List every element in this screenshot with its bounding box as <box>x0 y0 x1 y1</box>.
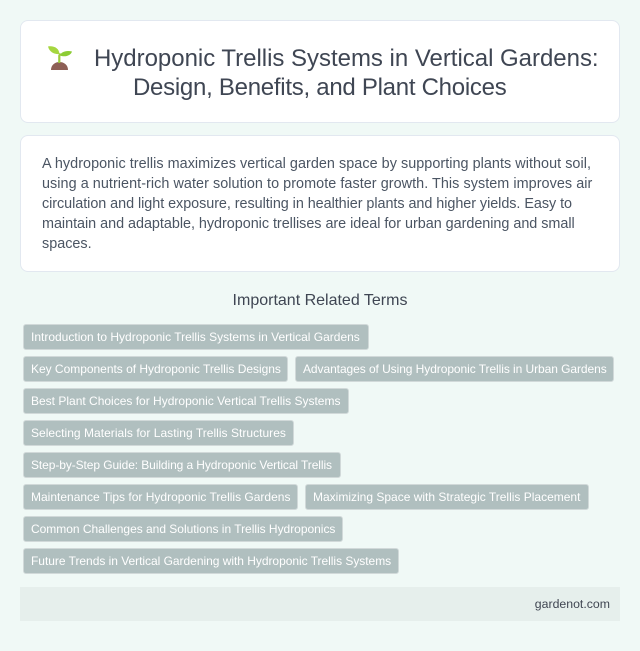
summary text: spaces. <box>42 236 92 252</box>
tag <box>23 324 369 350</box>
tag <box>23 484 298 510</box>
tag <box>305 484 589 510</box>
tag: Maintenance Tips for Hydroponic Trellis Gardens <box>31 490 290 504</box>
tag <box>295 356 614 382</box>
tag <box>23 548 399 574</box>
heading: important related terms: Important Related Terms <box>233 292 407 309</box>
title text <box>94 45 599 101</box>
tag <box>23 420 294 446</box>
panel: summary card <box>20 135 620 272</box>
tag: Maximizing Space with Strategic Trellis Placement <box>313 490 580 504</box>
tag <box>23 388 349 414</box>
tag: Common Challenges and Solutions in Trellis Hydroponics <box>31 522 335 536</box>
panel: title card <box>20 20 620 123</box>
panel: related term tags <box>23 324 614 574</box>
tag <box>23 452 341 478</box>
tag: Introduction to Hydroponic Trellis Systems in Vertical Gardens <box>31 330 360 344</box>
summary text: A hydroponic trellis maximizes vertical garden space by supporting plants without soil, <box>42 156 591 172</box>
footer bar <box>20 587 620 621</box>
summary text: maintain and adaptable, hydroponic trellises are ideal for urban gardening and small <box>42 216 575 232</box>
tag <box>23 516 343 542</box>
summary text: using a nutrient-rich water solution to promote faster growth. This system improves air <box>42 176 592 192</box>
tag: Selecting Materials for Lasting Trellis Structures <box>31 426 286 440</box>
tag: Advantages of Using Hydroponic Trellis in Urban Gardens <box>303 362 607 376</box>
summary text <box>42 156 592 252</box>
tag <box>23 356 288 382</box>
tag: Best Plant Choices for Hydroponic Vertical Trellis Systems <box>31 394 340 408</box>
summary text: circulation and light exposure, resulting in healthier plants and higher yields. Easy to <box>42 196 572 212</box>
tag: Future Trends in Vertical Gardening with Hydroponic Trellis Systems <box>31 554 391 568</box>
tag: Step-by-Step Guide: Building a Hydroponic Vertical Trellis <box>31 458 332 472</box>
title text: Design, Benefits, and Plant Choices <box>133 74 506 101</box>
tag: Key Components of Hydroponic Trellis Designs <box>31 362 281 376</box>
icon: seedling <box>48 46 72 70</box>
title text: Hydroponic Trellis Systems in Vertical Gardens: <box>94 45 599 72</box>
footer source text: gardenot.com <box>535 597 610 611</box>
